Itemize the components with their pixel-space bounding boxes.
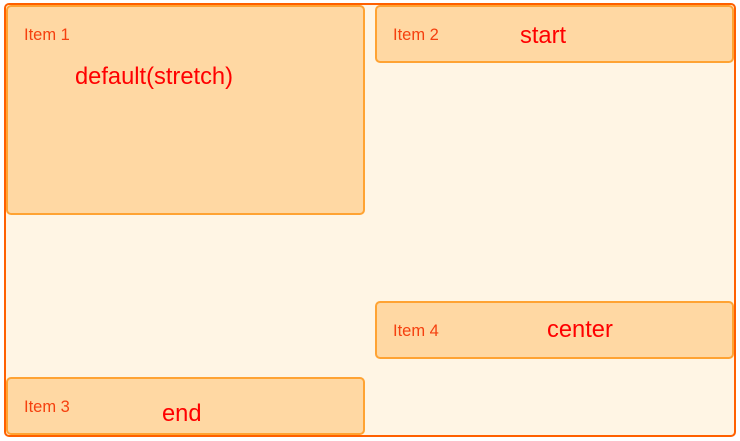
note: default stretch: default(stretch): [75, 64, 233, 90]
panel: item 1 stretch: [6, 5, 365, 215]
label: item 4: Item 4: [393, 322, 439, 340]
panel: item 4 center: [375, 301, 734, 359]
note: end: end: [162, 401, 202, 427]
note: center: center: [547, 317, 613, 343]
label: item 1: Item 1: [24, 26, 70, 44]
label: item 3: Item 3: [24, 398, 70, 416]
label: item 2: Item 2: [393, 26, 439, 44]
note: start: start: [520, 23, 566, 49]
panel: item 2 start: [375, 5, 734, 63]
panel: item 3 end: [6, 377, 365, 435]
